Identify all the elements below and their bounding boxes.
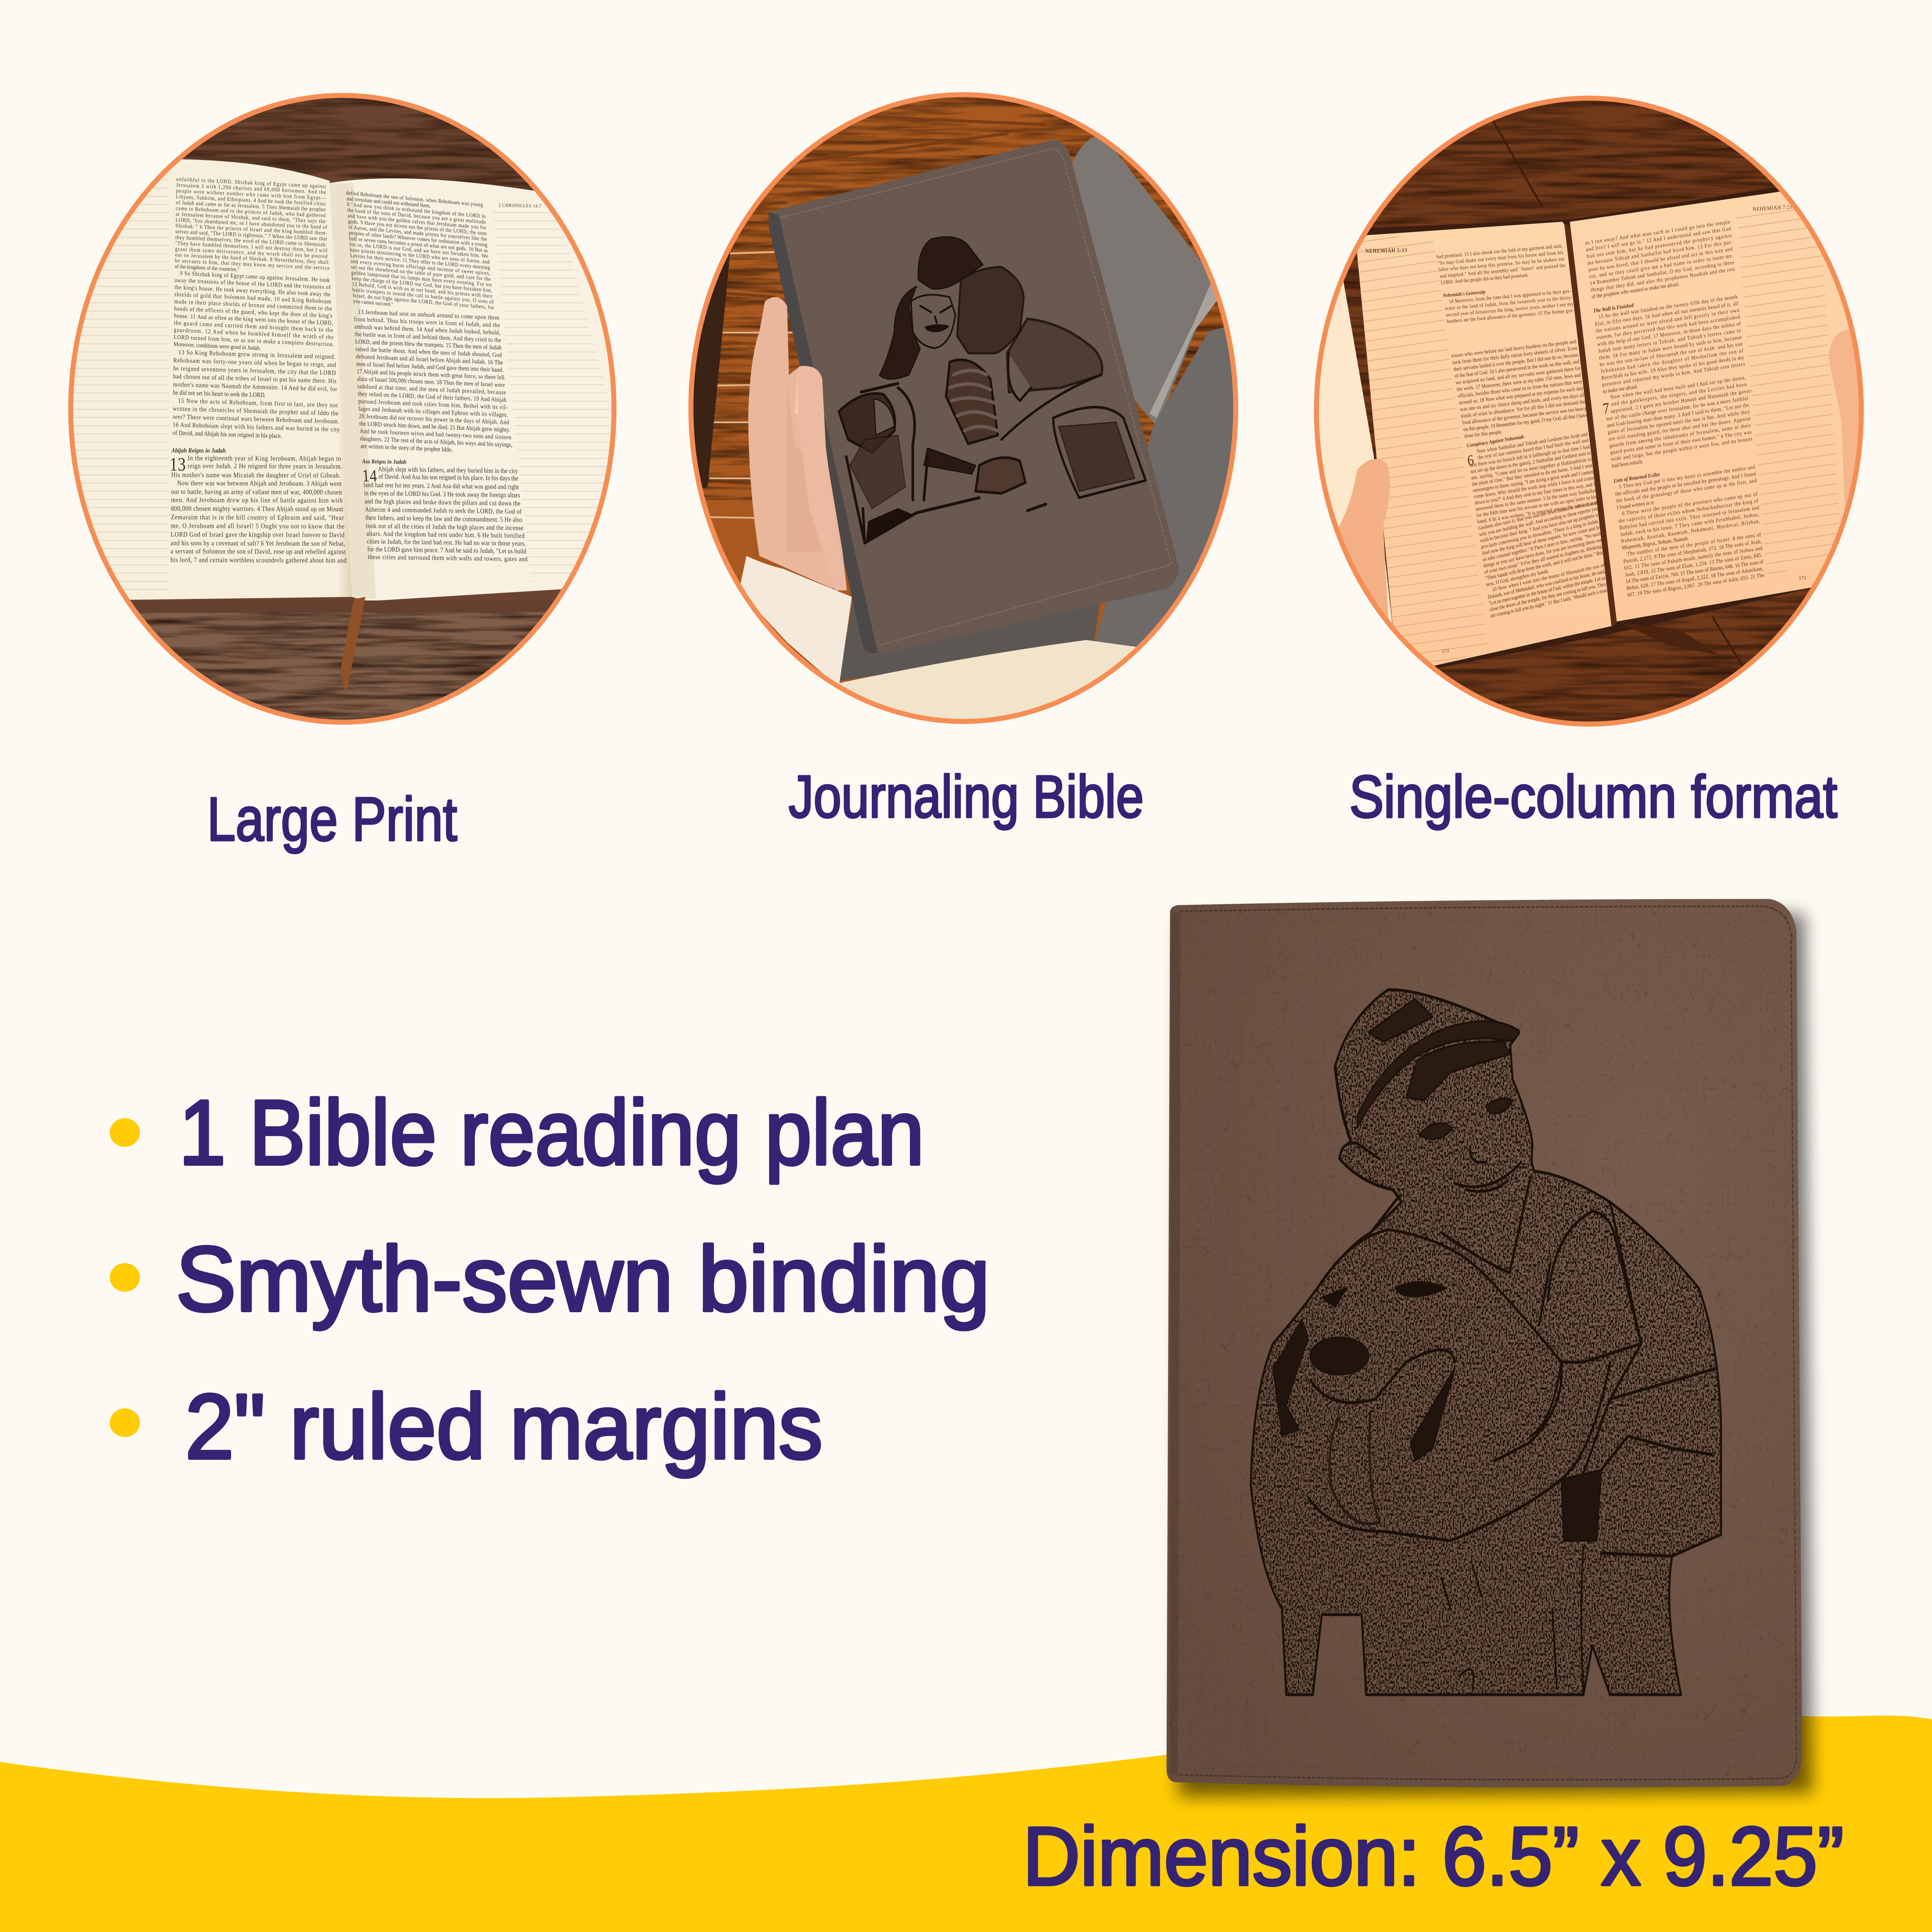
right page text: Berechiah as his wife. 19 Also they spoke of his good deeds in my — [1601, 354, 1745, 381]
engraved family portrait — [839, 237, 1146, 543]
left page text: LORD turned from him, so as not to make a complete destruction. — [173, 334, 334, 348]
woman's hair — [879, 286, 920, 379]
left page text: of the fear of God. 16 I also persevered in the work on this wall, and — [1454, 358, 1580, 379]
left page text: Moreover, conditions were good in Judah. — [173, 341, 261, 352]
right page text: Parosh, 2,172. 9 The sons of Shephatiah, 372. 10 The sons of Arah, — [1623, 538, 1762, 564]
left page text: are coming to kill you by night." 11 But I said, "Should such a man — [1490, 587, 1608, 619]
left page text: come down. Why should the work stop while I leave it and come — [1473, 474, 1594, 500]
right page text: Asa Reigns in Judah — [362, 458, 406, 466]
ribbon — [1620, 623, 1719, 655]
left page text: a servant of Solomon the son of David, rose up and rebelled against — [170, 547, 346, 556]
left page text: Conspiracy Against Nehemiah — [1466, 433, 1524, 449]
left page text: selves and said, "The LORD is righteous." 7 When the LORD saw that — [175, 228, 327, 242]
right page text: have priests ministering to the LORD who are sons of Aaron, and — [350, 247, 490, 265]
left page text: close the doors of the temple, for they are coming to kill you. They — [1489, 580, 1607, 612]
right page text: and have with you the golden calves that Jeroboam made you for — [347, 213, 486, 231]
left page text: "Let us meet together in the house of God, within the temple. Let us — [1488, 574, 1606, 606]
thumb over book — [798, 367, 846, 590]
left page text: he reigned seventeen years in Jerusalem, the city that the LORD — [173, 365, 336, 377]
left page text: answered them in the same manner. 5 In the same way Sanballat — [1475, 487, 1596, 512]
ribbon marker — [340, 597, 366, 694]
right page text: me because Tobiah and Sanballat had hired him. 13 For this pur- — [1587, 239, 1733, 266]
left page text: Zemaraim that is in the hill country of Ephraim and said, "Hear — [171, 513, 344, 522]
right page text: and live? I will not go in." 12 And I understood and saw that God — [1585, 225, 1731, 253]
wood floor — [669, 69, 1268, 767]
hand — [748, 297, 847, 590]
left page text: men. And Jeroboam drew up his line of battle against him with — [171, 496, 343, 504]
left page text: written in the chronicles of Shemaiah the prophet and of Iddo the — [173, 405, 338, 417]
right page text: from behind. Thus his troops were in front of Judah, and the — [354, 316, 500, 329]
left page text: me, saying, "Come and let us meet together at Hakkephirim in — [1471, 456, 1592, 481]
left page text: 572 — [1442, 648, 1449, 654]
child's legs — [924, 448, 976, 474]
left page text: "They have humbled themselves. I will not destroy them, but I will — [175, 240, 328, 253]
silhouette speckle shading — [1251, 990, 1721, 1695]
right page text: set out the showbread on the table of pure gold, and care for the — [351, 264, 491, 282]
bullet: margins — [110, 1408, 140, 1437]
left page text: around us. 18 Now what was prepared at my expense for each day — [1458, 385, 1584, 406]
little child at left — [839, 393, 895, 452]
left page text: seer? There were continual wars between Rehoboam and Jeroboam. — [173, 413, 339, 425]
right page text: peoples of other lands? Whoever comes for ordination with a young — [349, 230, 488, 248]
left page text: things as you say have been done, for you are inventing them out — [1483, 536, 1602, 569]
right page text: sin, and so they could give me a bad name in order to taunt me. — [1589, 252, 1734, 279]
left page text: 16 And Rehoboam slept with his fathers and was buried in the city — [173, 421, 340, 433]
right page text: gates of Jerusalem be opened until the sun is hot. And while they — [1607, 408, 1750, 435]
right page text: ambush was behind them. 14 And when Judah looked, behold, — [354, 323, 500, 336]
right page text: the officials and the people to be enrolled by genealogy. And I found — [1615, 470, 1756, 497]
left page text: for the fifth time sent his servant to me with an open letter in his — [1476, 493, 1597, 519]
right page text: raised the battle shout. And when the men of Judah shouted, God — [355, 346, 502, 359]
left page text: at Jerusalem because of Shishak, and said to them, "Thus says the — [176, 211, 325, 224]
left page text: down to you?" 4 And they sent to me four times in this way, and I — [1474, 481, 1595, 506]
right page text: 14 The sons of Zaccai, 760. 15 The sons of Binnui, 648. 16 The sons of — [1625, 558, 1764, 585]
dog eyes — [1322, 1282, 1446, 1307]
outline — [1251, 990, 1721, 1695]
right page text: Israel, do not fight against the LORD, the God of your fathers, for — [352, 292, 494, 311]
right page text: 573 — [1799, 576, 1806, 581]
right page text: keep the charge of the LORD our God, but you have forsaken him. — [352, 275, 492, 294]
left page text: of Judah and came as far as Jerusalem. 5 Then Shemaiah the prophet — [176, 199, 326, 213]
right page text: of Aaron, and the Levites, and made priests for yourselves like the — [348, 224, 487, 242]
left page text: his lord, 7 and certain worthless scoundrels gathered about him and — [170, 556, 347, 564]
left page text: Rehoboam was forty-one years old when he began to reign, and — [173, 357, 336, 369]
left page text: 13 So King Rehoboam grew strong in Jerusalem and reigned. — [179, 349, 336, 361]
right page text: Mispereth, Bigvai, Nehum, Baanah. — [1621, 535, 1689, 551]
right page text: the nations around us were afraid and fell greatly in their own — [1595, 307, 1740, 334]
right page text: and every evening burnt offerings and incense of sweet spices, — [350, 258, 490, 276]
right page text: the battle was in front of and behind them. And they cried to the — [355, 331, 502, 344]
right page text: wide and large, but the people within it were few, and no houses — [1611, 435, 1753, 462]
left page text: reign over Judah. 2 He reigned for three years in Jerusalem. — [187, 462, 342, 470]
right page text: 652. 11 The sons of Pahath-moab, namely the sons of Jeshua and — [1624, 545, 1763, 571]
left page text: 15 Now the acts of Rehoboam, from first to last, are they not — [178, 397, 338, 409]
right page text: 20 Jeroboam did not recover his power in the days of Abijah. And — [359, 413, 509, 426]
left page text: 10 Now when I went into the house of Shemaiah the son of — [1492, 561, 1605, 593]
dimension label: Dimension: 6.5” x 9.25” — [1023, 1810, 1844, 1903]
photo: large print open Bible — [68, 93, 617, 725]
left page text: on this people. 19 Remember for my good, O my God, all that I have — [1463, 412, 1588, 432]
caption: Journaling Bible: Journaling Bible — [789, 763, 1144, 830]
right page text: slain of Israel 500,000 chosen men. 18 Thus the men of Israel were — [357, 376, 505, 389]
right page text: esteem, for they perceived that this work had been accomplished — [1596, 313, 1740, 340]
ear — [1340, 1143, 1401, 1202]
right page text: Levites for their service. 11 They offer to the LORD every morning — [350, 252, 490, 270]
photo: journaling Bible with engraved cover held on lap — [669, 69, 1268, 767]
right page text: 8 "And now you think to withstand the kingdom of the LORD in — [347, 201, 486, 219]
left page text: NEHEMIAH 5:13 — [1365, 247, 1407, 254]
page edge block — [1287, 271, 1394, 642]
dark book cover — [1361, 185, 1819, 670]
dog head — [1317, 1230, 1561, 1436]
left page text: LORD God of Israel gave the kingship over Israel forever to David — [171, 530, 345, 539]
right page text: appointed, 2 I gave my brother Hanani and Hananiah the gover- — [1610, 387, 1753, 414]
left page text: shields of gold that Solomon had made, 10 and King Rehoboam — [174, 291, 332, 305]
spine shadow — [1564, 224, 1617, 627]
right page text: 12 Behold, God is with us at our head, and his priests with their — [352, 281, 493, 299]
right page text: 667. 19 The sons of Bigvai, 2,067. 20 The sons of Adin, 655. 21 The — [1627, 572, 1765, 598]
right page text: I found written in it: — [1617, 499, 1655, 510]
right page text: bull or seven rams becomes a priest of what are not gods. 10 But as — [349, 235, 488, 253]
man's head — [957, 267, 1024, 353]
left page text: proclaim concerning you in Jerusalem, 'There is a king in Judah.' — [1480, 517, 1600, 550]
woman's face — [911, 295, 955, 348]
right page text: Elul, in fifty-two days. 16 And when all our enemies heard of it, all — [1595, 300, 1739, 327]
left page text: made in their place shields of bronze and committed them to the — [174, 298, 332, 312]
engraved boy and dog — [1251, 990, 1721, 1695]
dog muzzle and ear — [1311, 1350, 1455, 1403]
left page text: took from them for their daily ration forty shekels of silver. Even — [1452, 345, 1578, 366]
left page text: Now there was war between Abijah and Jeroboam. 3 Abijah went — [177, 479, 342, 488]
left page text: their servants lorded it over the people. But I did not do so, because — [1453, 352, 1579, 372]
left page — [1355, 222, 1613, 667]
left page text: ernor in the land of Judah, from the twentieth year to the thirty- — [1444, 294, 1573, 311]
right page text: you cannot succeed." — [353, 298, 393, 308]
right page text: had not sent him, but he had pronounced the prophecy against — [1586, 232, 1732, 259]
left page text: hand. 6 In it was written, "It is reported among the nations, and — [1477, 500, 1598, 525]
left page text: kinds of wine in abundance. Yet for all this I did not demand the — [1461, 398, 1586, 419]
left page text: Now when Sanballat and Tobiah and Geshem the Arab and — [1476, 431, 1588, 454]
left page text: grant them some deliverance, and my wrath shall not be poured — [175, 246, 328, 259]
left page text: food allowance of the governor, because the service was too heavy — [1462, 405, 1587, 426]
right page text: are still standing guard, let them shut and bar the doors. Appoint — [1608, 415, 1751, 442]
Bible cover product shot — [1167, 899, 1812, 1797]
left page text: the plain of Ono." But they intended to do me harm. 3 And I sent — [1472, 462, 1593, 487]
right page text: cities in Judah, for the land had rest. He had no war in those years, — [367, 538, 526, 547]
sleeve and shirt — [1510, 1177, 1716, 1399]
right page text: they relied on the LORD, the God of their fathers. 19 And Abijah — [358, 391, 507, 403]
right page text: 17 Abijah and his people struck them with great force, so there fell — [357, 368, 505, 381]
left page text: the king's house. He took away everything. He also took away the — [175, 284, 331, 298]
right page text: lages and Jeshanah with its villages and Ephron with its villages. — [359, 406, 508, 418]
right page — [1570, 190, 1871, 621]
left page text: of your own mind." 9 For they all wanted to frighten us, thinking, — [1484, 543, 1603, 575]
right hand — [1828, 330, 1878, 517]
left page text: LORD. And the people did as they had promised. — [1440, 272, 1529, 286]
right page text: for us, the LORD is our God, and we have not forsaken him. We — [349, 241, 488, 259]
left page text: "Their hands will drop from the work, and it will not be done." But — [1485, 549, 1603, 581]
bullet: reading plan — [110, 1118, 140, 1147]
left page text: LORD, 'You abandoned me, so I have abandoned you to the hand of — [175, 216, 327, 230]
left page text: 13 — [169, 454, 186, 475]
left page text: people were without number who came with him from Egypt— — [176, 187, 326, 201]
left page text: the guard came and carried them and brought them back to the — [174, 320, 333, 334]
right page text: guards from among the inhabitants of Jerusalem, some at their — [1609, 422, 1751, 449]
left page text: and his sons by a covenant of salt? 6 Yet Jeroboam the son of Nebat, — [171, 539, 345, 548]
feature: Smyth-sewn binding: Smyth-sewn binding — [176, 1228, 990, 1330]
right page text: men of Israel fled before Judah, and God gave them into their hand. — [356, 361, 503, 374]
right page text: the hand of the sons of David, because you are a great multitude — [347, 207, 486, 225]
right page text: and irresolute and could not withstand them. — [346, 195, 431, 209]
left page text: Geshem also says it, that you and the Jews intend to rebel; that is — [1478, 499, 1598, 531]
left page text: they humbled themselves, the word of the LORD came to Shemaiah: — [175, 234, 327, 248]
left page text: ernors who were before me laid heavy burdens on the people and — [1451, 338, 1577, 359]
right page text: took out of all the cities of Judah the high places and the incense — [366, 522, 524, 532]
right page text: And he took fourteen wives and had twenty-two sons and sixteen — [360, 428, 512, 441]
cap brim and badge — [1357, 1021, 1519, 1128]
photo: single-column format open Bible held in hands — [1287, 69, 1886, 767]
left page text: the rest of our enemies heard that I had built the wall and — [1477, 437, 1589, 461]
left page text: of David, and Abijah his son reigned in his place. — [173, 429, 282, 440]
left page text: 9 So Shishak king of Egypt came up against Jerusalem. He took — [180, 270, 330, 284]
grey fabric of lap — [839, 135, 1253, 681]
right page text: as I run away? And what man such as I could go into the temple — [1585, 219, 1730, 246]
left page text: wish to become their king. 7 And you have also set up prophets to — [1480, 511, 1599, 544]
lower fur strokes — [1442, 1547, 1583, 1695]
left page text: away the treasures of the house of the LORD and the treasures of — [175, 277, 331, 291]
right page text: pose he was hired, that I should be afraid and act in this way and — [1588, 245, 1733, 273]
right page text: 7 — [1602, 400, 1611, 418]
right page text: daughters. 22 The rest of the acts of Abijah, his ways and his sayings, — [360, 435, 513, 449]
right page text: 6 These were the people of the province who came up out of — [1622, 491, 1758, 517]
left page — [73, 159, 352, 600]
left page text — [1365, 243, 1610, 654]
left page text: brothers ate the food allowance of the governor. 15 The former gov- — [1447, 308, 1575, 324]
left page text: and emptied." And all the assembly said "Amen" and praised the — [1439, 262, 1566, 279]
left page text: me, O Jeroboam and all Israel! 5 Ought you not to know that the — [171, 522, 345, 530]
hair — [1406, 1041, 1510, 1100]
bullet: binding — [110, 1263, 140, 1292]
right page text: of David. And Asa his son reigned in his place. In his days the — [378, 473, 519, 482]
dog nose — [1310, 1337, 1369, 1374]
left page text: 800,000 chosen mighty warriors. 4 Then Abijah stood up on Mount — [171, 504, 344, 513]
left page text: Jerusalem 3 with 1,200 chariots and 60,000 horsemen. And the — [176, 182, 326, 195]
running head: 2 CHRONICLES 14:7 — [498, 203, 542, 209]
right page text: them. 18 For many in Judah were bound by oath to him, because — [1599, 334, 1742, 361]
right page text: things that they did, and also the prophetess Noadiah and the rest — [1590, 266, 1735, 293]
left page text: that there was no breach left in it (although up to that time I had — [1469, 443, 1590, 468]
right page text — [1583, 204, 1806, 598]
right page text: the captivity of those exiles whom Nebuchadnezzar the king of — [1618, 497, 1759, 524]
right page text: Asherim 4 and commanded Judah to seek the LORD, the God of — [365, 506, 522, 515]
right page text: Lists of Returned Exiles — [1613, 471, 1660, 484]
right page text: Nehemiah, Azariah, Raamiah, Nahamani, Mordecai, Bilshan, — [1621, 518, 1760, 544]
right page text: the book of the genealogy of those who came up at the first, and — [1616, 477, 1757, 504]
left page text: In the eighteenth year of King Jeroboam, Abijah began to — [188, 454, 341, 463]
left page text: had promised. 13 I also shook out the fold of my garment and said, — [1436, 243, 1563, 260]
leather cover — [1167, 899, 1802, 1787]
left page text: of the kingdoms of the countries." — [175, 263, 239, 272]
left hand — [1332, 459, 1390, 625]
right page text: their fathers, and to keep the law and the commandment. 5 He also — [365, 514, 522, 524]
right page text: guard posts and some in front of their own homes." 4 The city was — [1610, 429, 1752, 456]
right page text: for the LORD gave him peace. 7 And he said to Judah, "Let us build — [367, 546, 527, 555]
left page text: done for this people. — [1464, 429, 1503, 439]
child hair top — [918, 237, 983, 289]
right page text: defied Rehoboam the son of Solomon, when Rehoboam was young — [346, 190, 483, 208]
right page text: defeated Jeroboam and all Israel before Abijah and Judah. 16 The — [356, 354, 503, 366]
right page text: 14 Remember Tobiah and Sanballat, O my God, according to these — [1590, 259, 1735, 286]
left page text: not set up the doors in the gates), 2 Sanballat and Geshem sent to — [1470, 449, 1591, 474]
feature: 1 Bible reading plan: 1 Bible reading plan — [179, 1082, 924, 1184]
hands together — [976, 457, 1026, 493]
book cover edge — [124, 600, 568, 613]
right page text: these cities and surround them with walls and towers, gates and — [367, 554, 528, 563]
left page text: house. 11 And as often as the king went into the house of the LORD, — [174, 313, 333, 327]
right page text: Judah, each to his town. 7 They came with Zerubbabel, Jeshua, — [1620, 511, 1759, 537]
left page text: 14 Moreover, from the time that I was appointed to be their gov- — [1449, 288, 1571, 304]
right page text: presence and reported my words to him. And Tobiah sent letters — [1602, 361, 1745, 388]
right page text: Judah sent many letters to Tobiah, and Tobiah's letters came to — [1598, 327, 1741, 354]
eyes — [1419, 1098, 1512, 1139]
left page text: be servants to him, that they may know my service and the service — [175, 257, 330, 271]
left page text: mother's name was Naamah the Ammonite. 14 And he did evil, for — [173, 381, 337, 393]
left page text: And now the king will hear of these reports. So now come and let — [1481, 524, 1601, 556]
yellow wave band — [0, 1714, 1932, 1932]
right page text: of the prophets who wanted to make me afraid. — [1591, 281, 1680, 299]
dog tongue — [1330, 1412, 1379, 1524]
left page text: came to Rehoboam and to the princes of Judah, who had gathered — [176, 205, 326, 218]
right page text: 15 So the wall was finished on the twenty-fifth day of the month — [1598, 293, 1738, 320]
right page text: Jehohanan had taken the daughter of Meshullam the son of — [1600, 347, 1744, 374]
right page text: he was the son-in-law of Shecaniah the son of Arah: and his son — [1599, 340, 1743, 367]
left page text: officials, besides those who came to us from the nations that were — [1457, 378, 1583, 399]
right page text: Joab, 2,818. 12 The sons of Elam, 1,254. 13 The sons of Zattu, 845. — [1624, 551, 1763, 578]
left page text: out to battle, having an army of valiant men of war, 400,000 chosen — [171, 488, 342, 496]
Bible cover — [769, 140, 1179, 655]
right page text: golden lampstand that its lamps may burn every evening. For we — [351, 269, 492, 288]
right page text: and the gatekeepers, the singers, and the Levites had been — [1611, 381, 1747, 407]
left page text: Abijah Reigns in Judah — [171, 447, 226, 454]
left page text: hands of the officers of the guard, who kept the door of the king's — [174, 305, 333, 320]
left page text: guardroom. 12 And when he humbled himself the wrath of the — [174, 327, 333, 341]
right page text: had been rebuilt. — [1612, 458, 1643, 469]
right page text: The Wall Is Finished — [1593, 302, 1634, 314]
right page text: gods. 9 Have you not driven out the priests of the LORD, the sons — [348, 218, 487, 236]
left page text: messengers to them, saying, "I am doing a great work and I cannot — [1473, 468, 1594, 493]
right page text: are written in the story of the prophet Iddo. — [360, 443, 453, 453]
cover drop shadow — [1179, 914, 1812, 1797]
left page text: Libyans, Sukkiim, and Ethiopians. 4 And he took the fortified cities — [176, 193, 326, 207]
right page text: to make me afraid. — [1602, 383, 1638, 395]
left page text: second year of Artaxerxes the king, twelve years, neither I nor my — [1446, 301, 1574, 318]
right page text — [346, 190, 542, 563]
left page text — [168, 176, 348, 564]
left page text: the work. 17 Moreover, there were at my table 150 men, Jews and — [1456, 372, 1582, 392]
left page text: labor who does not keep this promise. So may he be shaken out — [1438, 256, 1565, 272]
cream sweater — [739, 556, 1149, 759]
caption: Single-column format: Single-column format — [1349, 763, 1837, 830]
left page text: had chosen out of all the tribes of Israel to put his name there. His — [173, 373, 337, 385]
right page — [330, 179, 634, 601]
feature: 2 inch ruled margins: 2" ruled margins — [185, 1376, 823, 1478]
striped child — [946, 360, 998, 444]
right page text: in the eyes of the LORD his God. 3 He took away the foreign altars — [364, 490, 520, 499]
right page text: 5 Then my God put it into my heart to assemble the nobles and — [1619, 464, 1755, 490]
right page text: LORD, and the priests blew the trumpets. 15 Then the men of Judah — [355, 338, 502, 351]
left page text: unfaithful to the LORD, Shishak king of Egypt came up against — [176, 176, 326, 189]
left page text: Shishak.'" 6 Then the princes of Israel and the king humbled them- — [175, 222, 327, 236]
right page text: and the high places and broke down the pillars and cut down the — [364, 498, 520, 507]
left page text: why you are building the wall. And according to these reports you — [1479, 505, 1599, 537]
right page text: Babylon had carried into exile. They returned to Jerusalem and — [1619, 504, 1760, 531]
feature list — [110, 1082, 990, 1478]
right page text: Abijah slept with his fathers, and they buried him in the city — [378, 466, 518, 475]
woman's torso and lower folds — [846, 383, 1046, 543]
right page text: nor of the castle charge over Jerusalem, for he was a more faithful — [1606, 395, 1749, 422]
right page text: with the help of our God. 17 Moreover, in those days the nobles of — [1597, 320, 1741, 347]
man's shoulder and arm — [1007, 319, 1102, 392]
right page text: Now when the wall had been built and I had set up the doors, — [1610, 374, 1746, 400]
right page text: battle trumpets to sound the call to battle against you. O sons of — [352, 286, 494, 305]
boy's arm over dog — [1308, 1362, 1610, 1541]
right page text: 13 Jeroboam had sent an ambush around to come upon them — [358, 309, 500, 321]
left page text: he did not set his heart to seek the LORD. — [173, 389, 266, 399]
left page text: "So may God shake out every man from his house and from his — [1437, 249, 1564, 266]
left page text: out on Jerusalem by the hand of Shishak. 8 Nevertheless, they shall — [175, 252, 328, 265]
left page text: 6 — [1466, 451, 1475, 469]
left page text: us take counsel together." 8 Then I sent to him, saying, "No such — [1482, 530, 1601, 563]
left page text: we acquired no land, and all my servants were gathered there for — [1455, 365, 1581, 386]
right page text: The number of the men of the people of Israel: 8 the sons of — [1627, 531, 1761, 557]
right page text: altars. And the kingdom had rest under him. 6 He built fortified — [366, 530, 525, 539]
right page text: subdued at that time, and the men of Judah prevailed, because — [357, 383, 506, 396]
right page text: 14 — [362, 466, 378, 486]
right page text: pursued Jeroboam and took cities from him, Bethel with its vil- — [358, 398, 508, 411]
left page text: now, O God, strengthen my hands. — [1486, 568, 1549, 588]
left page text: was one ox and six choice sheep and birds, and every ten days all — [1459, 391, 1585, 412]
caption: Large Print: Large Print — [207, 784, 457, 854]
right page text: and God-fearing man than many. 3 And I said to them, "Let not the — [1607, 401, 1749, 429]
right page text: the LORD struck him down, and he died. 21 But Abijah grew mighty. — [359, 420, 510, 434]
right page text: NEHEMIAH 7:21 — [1753, 204, 1793, 212]
left page text: His mother's name was Micaiah the daughter of Uriel of Gibeah. — [171, 471, 340, 479]
left page text: Delaiah, son of Mehetabel, who was confined to his home, he said, — [1487, 568, 1605, 600]
right page text: Bebai, 628. 17 The sons of Azgad, 2,322. 18 The sons of Adonikam, — [1626, 565, 1764, 591]
nose and mouth — [1455, 1146, 1521, 1191]
right page text: land had rest for ten years. 2 And Asa did what was good and right — [363, 481, 519, 491]
left page text: Nehemiah's Generosity — [1442, 289, 1486, 298]
